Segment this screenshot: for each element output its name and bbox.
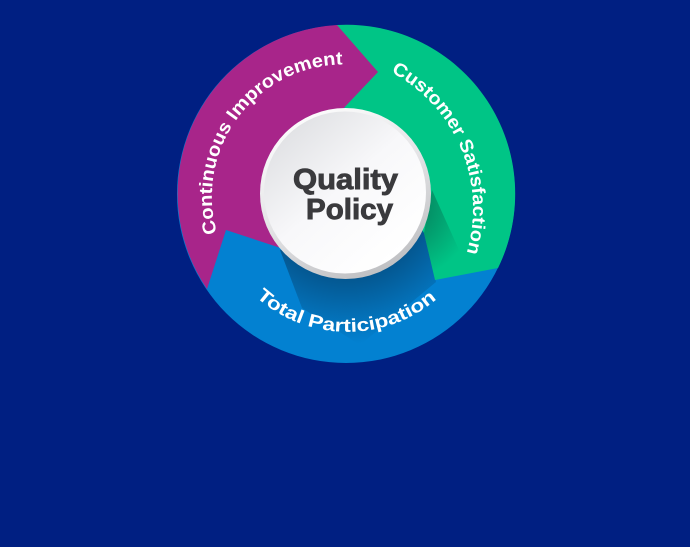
- label: continuous improvement: Continuous Improvement: [198, 52, 342, 234]
- panel: customer satisfaction segment: [337, 25, 515, 280]
- title: quality policy: Quality: [293, 164, 398, 196]
- title: quality policy: Policy: [306, 194, 393, 226]
- center disc: [260, 108, 431, 279]
- panel: total participation segment: [177, 25, 515, 363]
- title: quality policy: [293, 164, 398, 226]
- label: customer satisfaction: Customer Satisfaction: [394, 63, 486, 254]
- panel: continuous improvement segment: [178, 25, 378, 289]
- label: total participation: Total Participation: [260, 287, 436, 332]
